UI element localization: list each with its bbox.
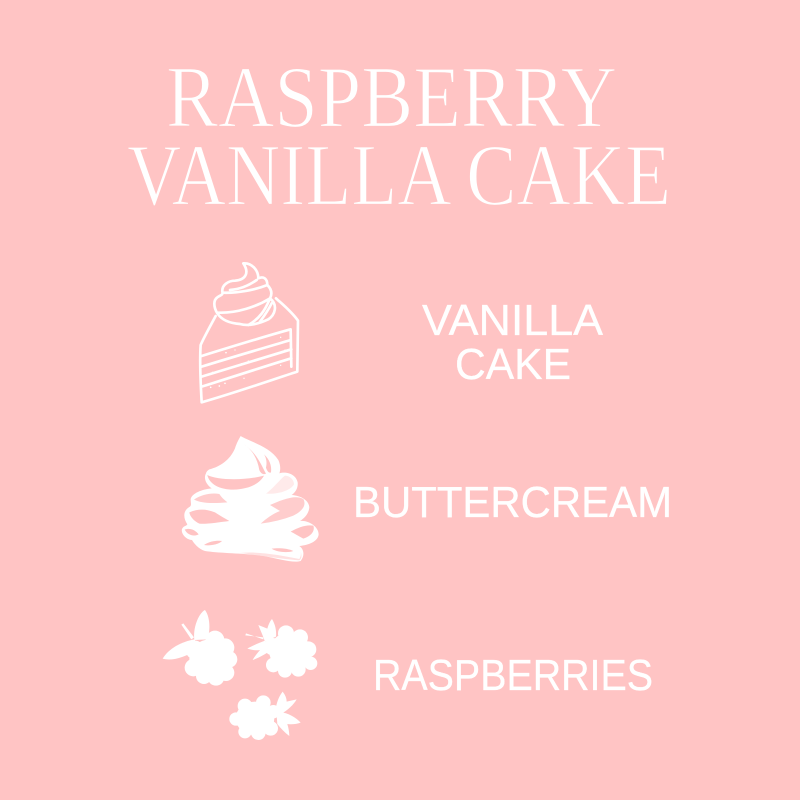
- label: vanilla cake: VANILLA: [422, 296, 604, 345]
- label: vanilla cake: CAKE: [455, 340, 571, 389]
- icon: cake slice: [200, 263, 298, 402]
- label: raspberries: RASPBERRIES: [373, 651, 653, 700]
- raspberry three: [229, 692, 301, 740]
- icon: buttercream swirl: [182, 436, 319, 562]
- raspberry one: [163, 610, 237, 686]
- label: vanilla cake: [422, 296, 604, 389]
- raspberry two: [245, 619, 317, 678]
- icon: raspberries: [163, 610, 317, 740]
- title: VANILLA CAKE: [127, 128, 671, 224]
- label: buttercream: BUTTERCREAM: [353, 478, 672, 527]
- title: RASPBERRY: [166, 50, 617, 146]
- title: [127, 50, 671, 224]
